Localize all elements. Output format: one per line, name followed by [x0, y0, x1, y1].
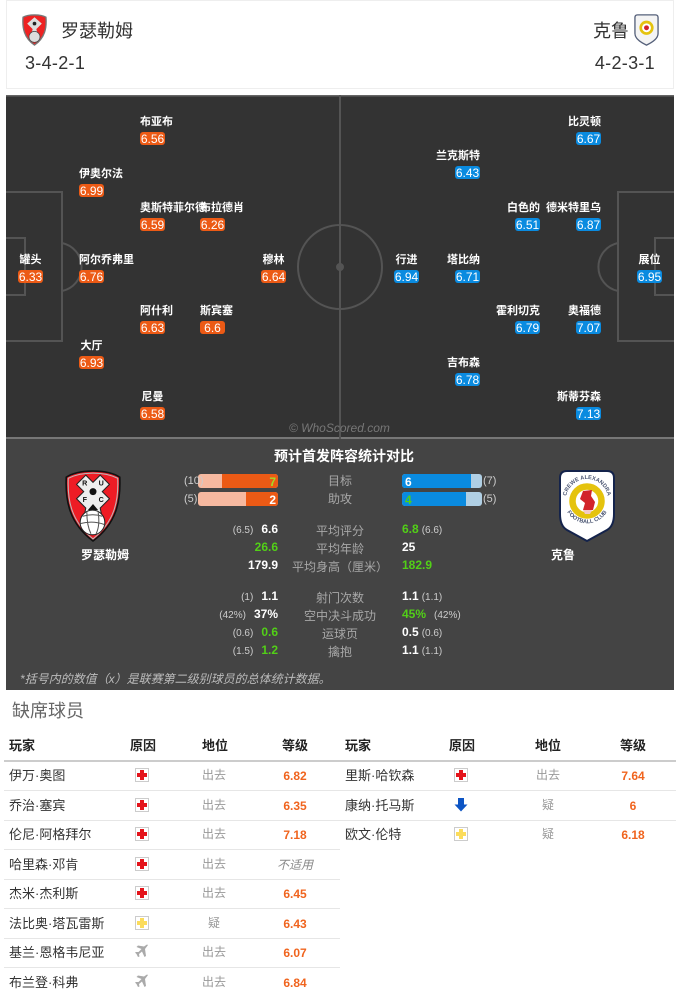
footnote: *括号内的数值（x）是联赛第二级别球员的总体统计数据。 — [20, 672, 331, 686]
table row: 里斯·哈钦森 — [340, 761, 676, 790]
stat: aerials away: 45% (42%) — [402, 607, 461, 621]
table header: left — [4, 738, 340, 762]
home player: 布亚布 — [140, 116, 173, 146]
table header: right — [340, 738, 676, 762]
home player: 奥斯特菲尔德: 奥斯特菲尔德 — [140, 202, 206, 214]
panel: lineup stats comparison — [6, 439, 674, 690]
assists league average: home: (5) — [184, 493, 197, 505]
stat: shots home: (1) 1.1 — [241, 589, 278, 603]
icon: Crewe crest small — [634, 14, 659, 46]
home player: 布亚布: 布亚布 — [140, 116, 173, 128]
icon: Rotherham crest large: F — [83, 495, 88, 504]
away player: 奥福德 — [568, 304, 601, 335]
icon: Rotherham crest small — [22, 14, 47, 46]
away player: 塔比纳: 塔比纳 — [447, 254, 480, 266]
assists value: away: 4 — [405, 493, 412, 507]
stat: tackles home: (1.5) 1.2 — [233, 643, 278, 657]
away player: 行进: 行进 — [396, 254, 418, 266]
away player: 斯蒂芬森: 斯蒂芬森 — [557, 391, 601, 403]
away player: 霍利切克: 6.79 — [516, 321, 539, 335]
home team name: 罗瑟勒姆 — [61, 21, 133, 41]
icon: Crewe crest large: FOOTBALL CLUB — [567, 510, 606, 524]
label: aerials won: 空中决斗成功 — [304, 609, 376, 623]
home player: 尼曼: 6.58 — [141, 407, 164, 421]
away player: 展位 — [637, 254, 662, 284]
table row: 法比奥·塔瓦雷斯: 疑 — [208, 916, 220, 930]
home player: 阿什利: 阿什利 — [140, 305, 173, 317]
home player: 伊奥尔法: 6.99 — [80, 184, 103, 198]
table row: 伊万·奥图 — [9, 768, 307, 783]
home player: 穆林: 6.64 — [262, 270, 285, 284]
away player: 斯蒂芬森 — [557, 390, 601, 421]
away player: 霍利切克 — [496, 304, 540, 335]
icon: Crewe crest large — [559, 470, 615, 542]
table row: 乔治·塞宾: 6.35 — [283, 799, 307, 813]
away player: 霍利切克: 霍利切克 — [496, 305, 540, 317]
away player: 白色的 — [507, 202, 540, 232]
away player: 吉布森: 6.78 — [456, 373, 479, 387]
home player: 布拉德肖: 布拉德肖 — [200, 202, 244, 214]
home player: 阿尔乔弗里 — [79, 254, 134, 284]
table row: 基兰·恩格韦尼亚: 出去 — [202, 945, 226, 959]
home player: 阿什利 — [140, 304, 173, 335]
table row: 哈里森·邓肯: 哈里森·邓肯 — [9, 857, 78, 872]
pitch lines — [6, 95, 674, 439]
stats heading: 预计首发阵容统计对比 — [274, 448, 414, 464]
table row: 伦尼·阿格拜尔: 7.18 — [283, 828, 307, 842]
table row: 乔治·塞宾: 出去 — [202, 798, 226, 812]
away player: 展位: 展位 — [638, 254, 660, 266]
away player: 比灵顿: 6.67 — [577, 132, 600, 146]
table row: 基兰·恩格韦尼亚: 6.07 — [283, 946, 307, 960]
home player: 斯宾塞: 斯宾塞 — [200, 305, 233, 317]
table header: left: 地位 — [202, 738, 228, 753]
panel: pitch — [6, 95, 674, 439]
table row: 乔治·塞宾 — [9, 798, 307, 813]
table row: 法比奥·塔瓦雷斯 — [4, 909, 340, 938]
table row: 哈里森·邓肯 — [4, 850, 340, 879]
stat: aerials home: (42%) 37% — [219, 607, 278, 621]
away player: 行进 — [394, 254, 419, 284]
away player: 斯蒂芬森: 7.13 — [577, 407, 600, 421]
table row: 杰米·杰利斯: 杰米·杰利斯 — [9, 886, 78, 901]
table header: left: 原因 — [130, 738, 156, 753]
home player: 尼曼 — [140, 391, 165, 421]
label: average rating: 平均评分 — [316, 524, 364, 538]
away player: 奥福德: 奥福德 — [568, 305, 601, 317]
away player: 塔比纳: 6.71 — [456, 270, 479, 284]
home player: 阿什利: 6.63 — [141, 321, 164, 335]
home player: 罐头: 罐头 — [20, 254, 42, 266]
table header: right: 玩家 — [345, 738, 371, 753]
away formation: 4-2-3-1 — [595, 53, 655, 73]
label: average height: 平均身高（厘米） — [292, 560, 388, 574]
label: shots: 射门次数 — [316, 591, 364, 605]
table row: 里斯·哈钦森: 7.64 — [621, 769, 645, 783]
goals value: away: 6 — [405, 475, 412, 489]
watermark: © WhoScored.com — [289, 421, 390, 435]
away crest caption: 克鲁 — [551, 548, 575, 562]
label: assists: 助攻 — [328, 492, 352, 506]
table row: 康纳·托马斯: 疑 — [542, 798, 554, 812]
away player: 白色的: 6.51 — [516, 218, 539, 232]
table row: 杰米·杰利斯 — [4, 879, 340, 908]
icon: Rotherham crest large: U — [99, 478, 104, 487]
table row: 康纳·托马斯 — [340, 791, 676, 820]
table row: 杰米·杰利斯: 出去 — [202, 886, 226, 900]
icon: Rotherham crest large — [65, 470, 121, 542]
goals league average: away: (7) — [483, 475, 496, 487]
away player: 奥福德: 7.07 — [577, 321, 600, 335]
icon: Crewe crest large: CREWE ALEXANDRA — [563, 475, 611, 496]
home player: 大厅 — [79, 340, 104, 370]
table row: 伦尼·阿格拜尔: 伦尼·阿格拜尔 — [9, 827, 91, 842]
table row: 哈里森·邓肯: 出去 — [202, 857, 226, 871]
table header: right: 等级 — [620, 738, 646, 753]
table row: 基兰·恩格韦尼亚: 基兰·恩格韦尼亚 — [9, 945, 104, 960]
table row: 欧文·伦特: 疑 — [542, 827, 554, 841]
home player: 斯宾塞 — [200, 304, 233, 335]
home player: 伊奥尔法 — [79, 168, 123, 198]
away player: 吉布森 — [447, 356, 480, 387]
label: tackles: 擒抱 — [328, 645, 352, 659]
home player: 布亚布: 6.56 — [141, 132, 164, 146]
assists league average: away: (5) — [483, 493, 496, 505]
table row: 伊万·奥图: 出去 — [202, 768, 226, 782]
table row: 康纳·托马斯: 6 — [630, 799, 636, 813]
table row: 布兰登·科弗: 6.84 — [283, 976, 307, 990]
table row: 欧文·伦特 — [340, 820, 676, 849]
table row: 法比奥·塔瓦雷斯: 6.43 — [283, 917, 307, 931]
away player: 比灵顿: 比灵顿 — [568, 116, 601, 128]
assists value: home: 2 — [269, 493, 276, 507]
icon: Rotherham crest large: C — [99, 495, 104, 504]
home player: 布拉德肖: 6.26 — [201, 218, 224, 232]
table row: 乔治·塞宾: 乔治·塞宾 — [9, 798, 65, 813]
home player: 穆林 — [261, 254, 286, 284]
table row: 哈里森·邓肯: 不适用 — [277, 858, 313, 872]
table header: right: 原因 — [449, 738, 475, 753]
label: average age: 平均年龄 — [316, 542, 364, 556]
away player: 兰克斯特 — [436, 150, 480, 180]
home player: 尼曼: 尼曼 — [142, 391, 164, 403]
away player: 德米特里乌 — [546, 202, 601, 232]
table row: 伦尼·阿格拜尔: 出去 — [202, 827, 226, 841]
table row: 布兰登·科弗 — [4, 968, 340, 997]
goals bar: away — [402, 474, 482, 488]
stat: height away: 182.9 — [402, 558, 432, 572]
stat: age home: 26.6 — [255, 540, 278, 554]
table row: 基兰·恩格韦尼亚 — [4, 938, 340, 967]
assists bar: home — [198, 492, 278, 506]
stat: height home: 179.9 — [248, 558, 278, 572]
stat: dribbles away: 0.5 (0.6) — [402, 625, 442, 639]
home player: 斯宾塞: 6.6 — [204, 321, 221, 335]
away team name: 克鲁 — [593, 21, 629, 41]
home player: 伊奥尔法: 伊奥尔法 — [79, 168, 123, 180]
away player: 兰克斯特: 兰克斯特 — [436, 150, 480, 162]
away player: 兰克斯特: 6.43 — [456, 166, 479, 180]
home player: 大厅: 大厅 — [80, 340, 102, 352]
stat: shots away: 1.1 (1.1) — [402, 589, 442, 603]
table row: 里斯·哈钦森: 里斯·哈钦森 — [345, 768, 414, 783]
home crest caption: 罗瑟勒姆 — [81, 548, 129, 562]
home player: 布拉德肖 — [200, 202, 244, 232]
table row: 里斯·哈钦森: 出去 — [536, 768, 560, 782]
table row: 伊万·奥图: 6.82 — [283, 769, 307, 783]
away player: 展位: 6.95 — [638, 270, 661, 284]
goals bar: home — [198, 474, 278, 488]
goals league average: home: (10) — [184, 475, 204, 487]
away player: 德米特里乌: 6.87 — [577, 218, 600, 232]
table row: 法比奥·塔瓦雷斯: 法比奥·塔瓦雷斯 — [9, 916, 104, 931]
away player: 吉布森: 吉布森 — [447, 357, 480, 369]
home player: 穆林: 穆林 — [262, 254, 284, 266]
table row: 欧文·伦特: 6.18 — [621, 828, 645, 842]
icon: Rotherham crest large: R — [82, 478, 88, 487]
home player: 罐头: 6.33 — [19, 270, 42, 284]
assists bar: away — [402, 492, 482, 506]
home player: 大厅: 6.93 — [80, 356, 103, 370]
away player: 行进: 6.94 — [395, 270, 418, 284]
label: goals: 目标 — [328, 474, 352, 488]
home player: 罐头 — [18, 254, 43, 284]
stat: rating away: 6.8 (6.6) — [402, 522, 442, 536]
table row: 康纳·托马斯: 康纳·托马斯 — [345, 798, 414, 813]
away player: 比灵顿 — [568, 116, 601, 146]
home player: 奥斯特菲尔德: 6.59 — [141, 218, 164, 232]
table row: 伦尼·阿格拜尔 — [9, 827, 307, 842]
table row: 杰米·杰利斯: 6.45 — [283, 887, 307, 901]
away player: 德米特里乌: 德米特里乌 — [546, 202, 601, 214]
heading: missing players: 缺席球员 — [12, 701, 84, 721]
home formation: 3-4-2-1 — [25, 53, 85, 73]
table header: left: 玩家 — [9, 738, 35, 753]
away player: 塔比纳 — [447, 254, 480, 284]
table row: 伊万·奥图: 伊万·奥图 — [9, 768, 65, 783]
stat: dribbles home: (0.6) 0.6 — [233, 625, 278, 639]
table header: left: 等级 — [282, 738, 308, 753]
home player: 奥斯特菲尔德 — [140, 202, 206, 232]
label: dribbles: 运球页 — [322, 627, 358, 641]
table row: 布兰登·科弗: 出去 — [202, 975, 226, 989]
table row: 欧文·伦特: 欧文·伦特 — [345, 827, 401, 842]
home player: 阿尔乔弗里: 6.76 — [80, 270, 103, 284]
away player: 白色的: 白色的 — [507, 202, 540, 214]
home player: 阿尔乔弗里: 阿尔乔弗里 — [79, 254, 134, 266]
table row: 布兰登·科弗: 布兰登·科弗 — [9, 975, 78, 990]
table header: right: 地位 — [535, 738, 561, 753]
goals value: home: 7 — [269, 475, 276, 489]
header panel — [6, 0, 674, 89]
stat: tackles away: 1.1 (1.1) — [402, 643, 442, 657]
stat: age away: 25 — [402, 540, 415, 554]
stat: rating home: (6.5) 6.6 — [233, 522, 278, 536]
